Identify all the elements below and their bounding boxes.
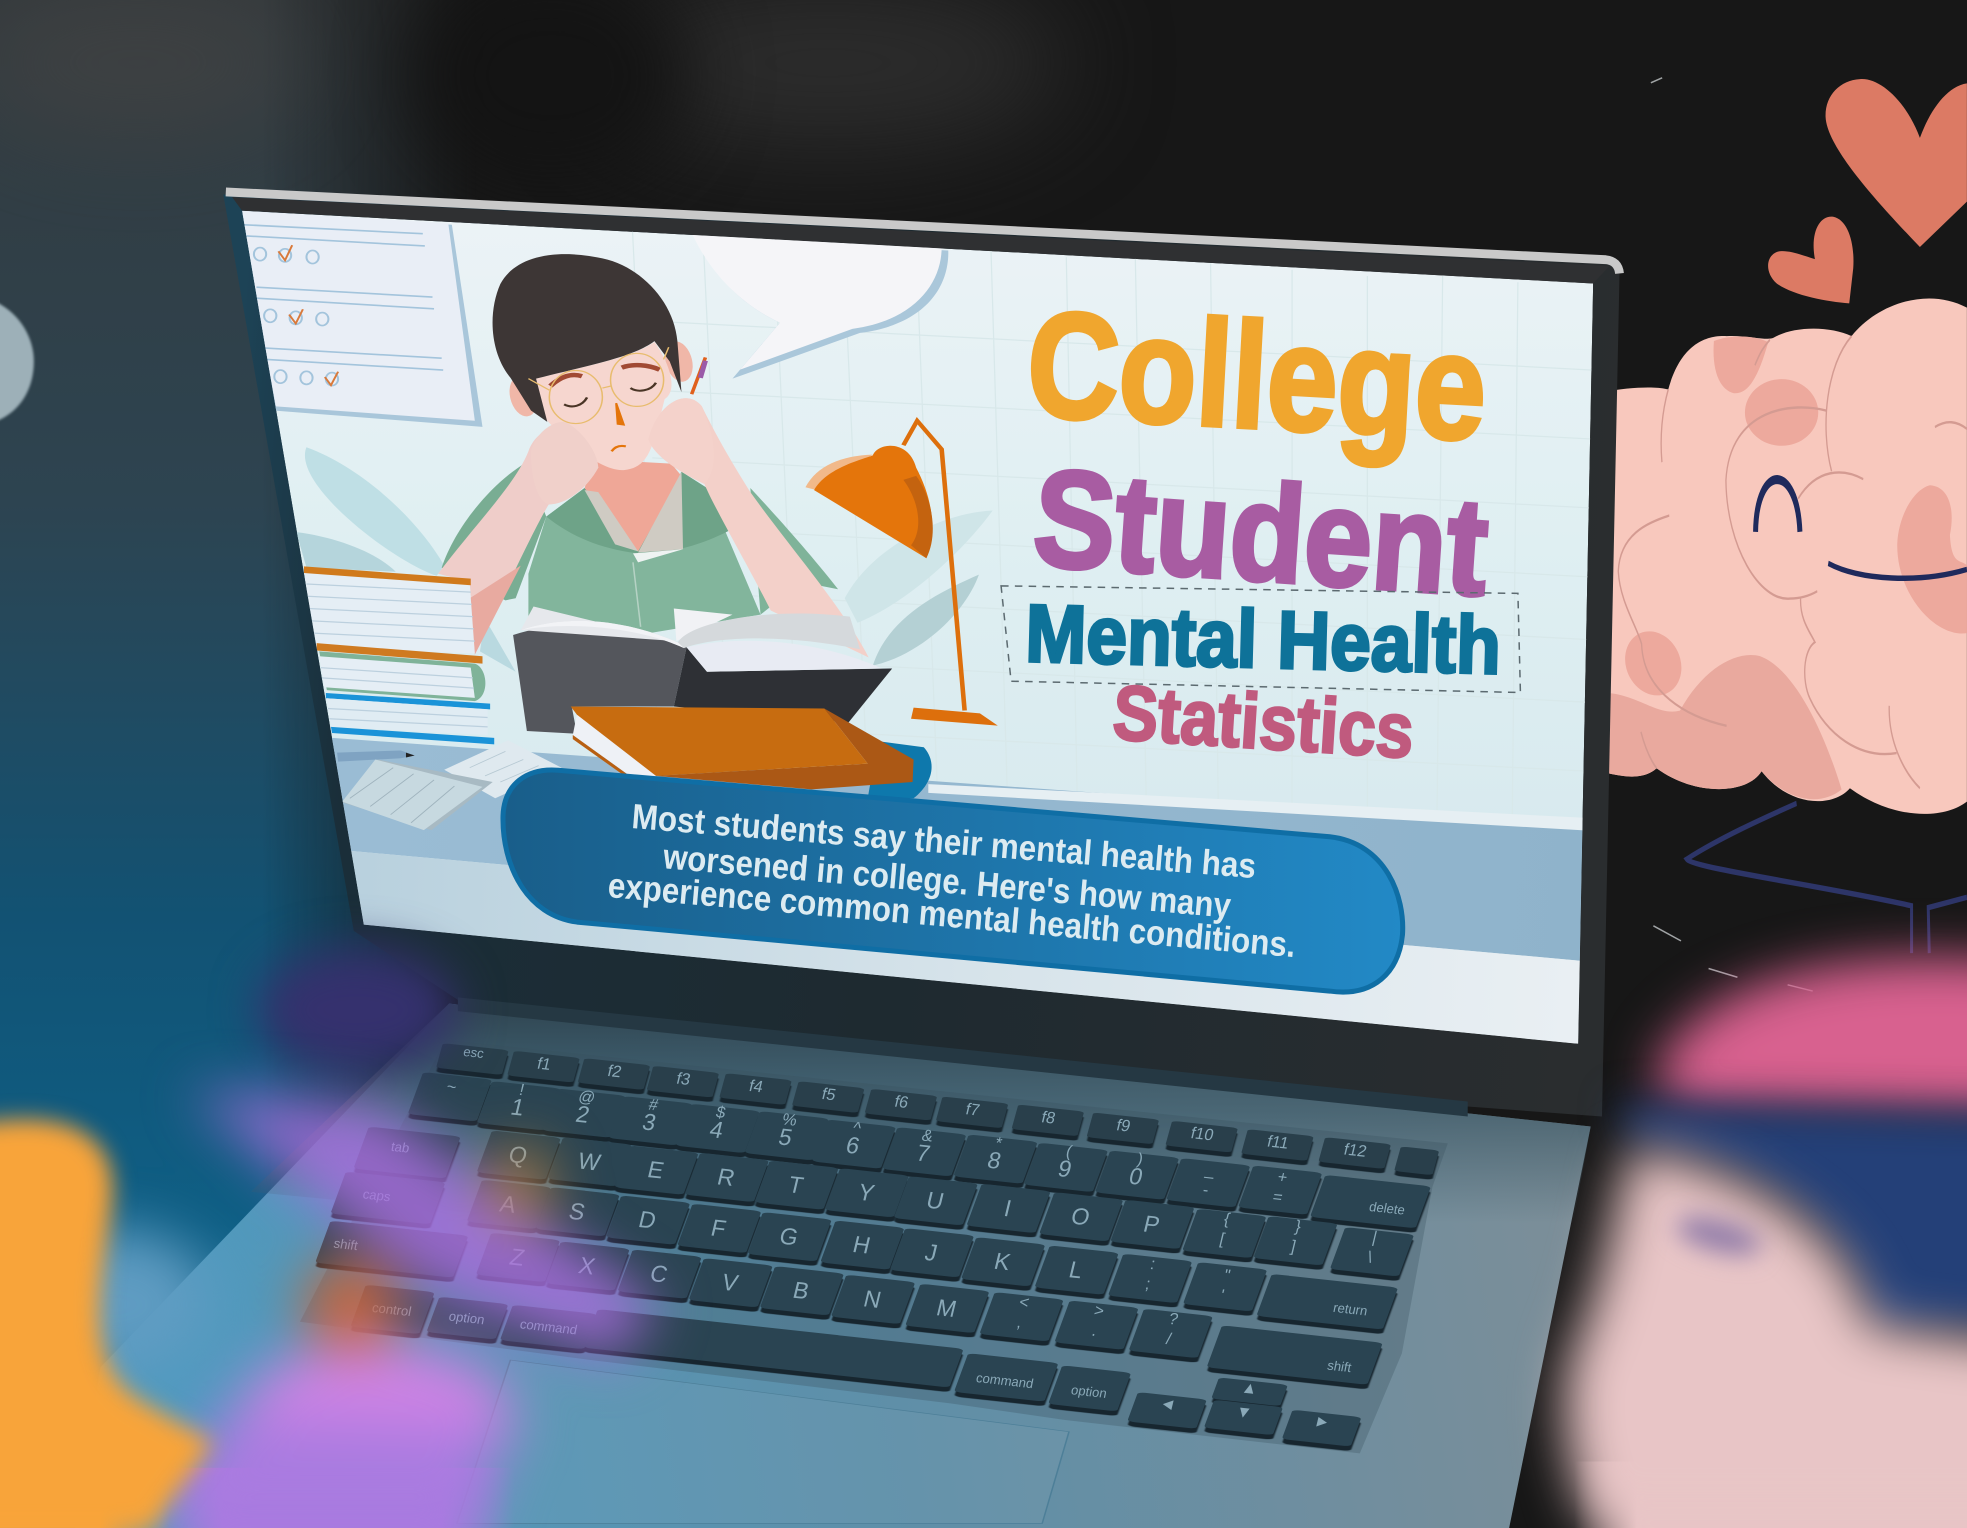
function key row	[436, 1043, 1439, 1175]
home key row: H	[850, 1231, 873, 1259]
screen grid	[632, 232, 1592, 703]
QWERTY key row: }	[1293, 1217, 1303, 1236]
modifier key row: command	[519, 1316, 579, 1337]
bottom letter key row: M	[934, 1294, 959, 1322]
number key row: 2	[573, 1101, 592, 1128]
bottom letter key row: Z	[507, 1244, 527, 1271]
home key row: return	[1332, 1300, 1369, 1318]
home key row: '	[1219, 1287, 1226, 1305]
number key row: ~	[445, 1078, 458, 1097]
home key row: :	[1148, 1255, 1157, 1273]
home key row: L	[1066, 1256, 1085, 1283]
function key row: f3	[675, 1070, 692, 1089]
title: Student: Student	[1029, 441, 1493, 625]
pen behind ear	[692, 357, 705, 394]
glasses	[528, 347, 669, 424]
number key row: 1	[508, 1094, 527, 1121]
number key row: 5	[776, 1124, 795, 1151]
open book	[513, 606, 892, 734]
brain shaded lower area	[1600, 655, 1842, 799]
number key row: -	[1201, 1181, 1211, 1199]
lid silver top edge	[226, 192, 1620, 273]
number key row: )	[1135, 1150, 1145, 1169]
plant leaves	[296, 447, 993, 672]
home key row	[330, 1172, 1398, 1330]
QWERTY key row: [	[1218, 1230, 1227, 1248]
hand fists over cheeks	[540, 425, 598, 504]
brain character	[1600, 298, 1967, 953]
blurred foreground character: right	[1565, 958, 1967, 1528]
modifier key row: ►	[1312, 1412, 1332, 1432]
orange closed book	[571, 706, 932, 798]
number key row: !	[517, 1081, 526, 1099]
modifier key row: control	[371, 1300, 413, 1319]
number key row: #	[647, 1096, 661, 1114]
home key row: ;	[1144, 1275, 1152, 1293]
function key row: f5	[820, 1085, 838, 1104]
blurred foreground character: left	[0, 947, 659, 1528]
function key row: f7	[964, 1100, 981, 1120]
modifier key row: ▲	[1240, 1379, 1260, 1398]
hinge	[458, 997, 1468, 1117]
mouth	[612, 446, 626, 451]
lid top bezel band	[232, 197, 1609, 284]
modifier key row: ◄	[1158, 1395, 1178, 1414]
brain smile	[1828, 563, 1967, 578]
bottom letter key row: ?	[1167, 1310, 1180, 1329]
function key row: esc	[462, 1044, 486, 1061]
bottom letter key row: N	[861, 1285, 884, 1313]
function key row: f1	[535, 1055, 553, 1074]
number key row: 7	[914, 1140, 933, 1167]
hair	[493, 254, 681, 422]
number key row: &	[920, 1127, 935, 1146]
modifier key row: option	[1070, 1382, 1108, 1401]
function key row: f6	[893, 1093, 910, 1112]
laptop lid and bezel	[223, 192, 1620, 1117]
home key row: K	[992, 1248, 1014, 1275]
QWERTY key row: Q	[506, 1141, 530, 1169]
QWERTY key row: P	[1141, 1211, 1162, 1238]
laptop base	[75, 1004, 1591, 1528]
description pill	[503, 770, 1403, 992]
home key row: A	[497, 1191, 519, 1218]
left arm	[438, 427, 598, 655]
dashed subtitle frame	[1001, 586, 1520, 692]
number key row: (	[1064, 1143, 1074, 1161]
title: Statistics: Statistics	[1110, 670, 1416, 775]
function key row: f4	[747, 1077, 765, 1096]
bottom letter key row: shift	[332, 1236, 360, 1253]
modifier key row: option	[448, 1309, 486, 1327]
illustration: student at desk	[240, 210, 998, 830]
QWERTY key row: I	[1002, 1195, 1014, 1221]
number key row: @	[577, 1088, 597, 1107]
speech bubble	[692, 233, 948, 379]
bottom letter key row: shift	[1326, 1358, 1353, 1375]
checklist sheet	[240, 210, 482, 427]
laptop screen	[240, 210, 1593, 1054]
brain legs	[1687, 803, 1967, 953]
QWERTY key row: {	[1222, 1210, 1232, 1228]
number key row: 8	[985, 1147, 1004, 1174]
number key row: delete	[1368, 1199, 1406, 1218]
keyboard	[300, 1040, 1448, 1523]
title: College: College	[1023, 279, 1491, 472]
neck	[585, 459, 681, 551]
brain body	[1600, 298, 1967, 814]
description line 1: Most students say their mental health has	[630, 797, 1257, 886]
brain spots	[1623, 336, 1967, 702]
number key row: 6	[843, 1132, 862, 1159]
right arm	[648, 398, 869, 657]
bottom letter key row: X	[576, 1252, 598, 1280]
description line 2: worsened in college. Here's how many	[661, 837, 1233, 926]
number key row: 4	[707, 1116, 726, 1143]
modifier key row: command	[975, 1370, 1035, 1391]
QWERTY key row: ]	[1289, 1237, 1298, 1256]
bottom letter key row: B	[790, 1277, 812, 1304]
book stack	[304, 566, 494, 744]
QWERTY key row: E	[645, 1156, 667, 1183]
QWERTY key row	[353, 1127, 1414, 1277]
bottom letter key row: ,	[1015, 1313, 1024, 1332]
bottom letter key row: >	[1092, 1302, 1106, 1320]
title: Mental Health: Mental Health	[1024, 588, 1502, 692]
eyebrows	[550, 365, 660, 386]
QWERTY key row: R	[715, 1163, 738, 1191]
QWERTY key row: \	[1366, 1248, 1375, 1267]
home key row: F	[708, 1215, 729, 1242]
number key row: ^	[851, 1119, 863, 1138]
bottom letter key row	[315, 1221, 1383, 1385]
pencil and papers	[337, 740, 562, 830]
function key row: f2	[606, 1062, 623, 1081]
QWERTY key row: Y	[856, 1179, 877, 1206]
decorative blurred moon at left edge	[0, 299, 34, 424]
reflected specks	[1651, 78, 1813, 991]
function key row: f12	[1342, 1141, 1369, 1161]
number key row: 3	[640, 1109, 659, 1136]
home key row: caps	[362, 1186, 392, 1204]
desk band	[329, 738, 1587, 961]
function key row: f11	[1265, 1133, 1291, 1153]
trackpad	[457, 1360, 1069, 1523]
number key row: =	[1271, 1188, 1284, 1207]
number key row: 9	[1055, 1155, 1074, 1182]
home key row: D	[636, 1206, 659, 1234]
modifier key row	[350, 1285, 1361, 1447]
number key row: 0	[1127, 1163, 1145, 1190]
modifier key row: ▼	[1234, 1403, 1254, 1422]
function key row: f10	[1189, 1124, 1215, 1144]
brain eye	[1756, 480, 1800, 532]
bottom letter key row: C	[648, 1260, 670, 1288]
home key row: J	[922, 1239, 940, 1266]
function key row: f9	[1115, 1116, 1132, 1136]
bottom letter key row: /	[1164, 1330, 1173, 1348]
hearts above the brain	[1768, 79, 1967, 303]
home key row: S	[566, 1198, 588, 1225]
keyboard well	[300, 1040, 1448, 1453]
home key row: G	[777, 1223, 801, 1250]
number key row: $	[714, 1103, 727, 1122]
number key row	[408, 1072, 1431, 1228]
brain fold lines	[1618, 336, 1967, 788]
bottom letter key row: <	[1017, 1293, 1031, 1312]
closed eyes	[564, 383, 656, 406]
bottom letter key row: .	[1090, 1322, 1099, 1340]
lamp	[805, 421, 998, 726]
number key row: _	[1203, 1161, 1218, 1180]
number key row: +	[1276, 1168, 1289, 1187]
bottom letter key row: V	[719, 1269, 741, 1296]
QWERTY key row: tab	[390, 1139, 411, 1156]
face	[536, 342, 672, 470]
home key row: "	[1222, 1266, 1232, 1285]
QWERTY key row: O	[1069, 1203, 1093, 1230]
QWERTY key row: U	[924, 1187, 946, 1214]
QWERTY key row: |	[1370, 1229, 1379, 1247]
QWERTY key row: W	[575, 1148, 603, 1175]
description line 3: experience common mental health conditions.	[606, 866, 1297, 965]
student torso and shirt	[442, 459, 838, 635]
nose	[616, 403, 624, 425]
number key row: *	[993, 1134, 1004, 1153]
ears	[506, 340, 696, 418]
collar	[585, 490, 638, 551]
QWERTY key row: T	[786, 1171, 806, 1198]
function key row: f8	[1040, 1108, 1057, 1128]
number key row: %	[780, 1110, 799, 1130]
